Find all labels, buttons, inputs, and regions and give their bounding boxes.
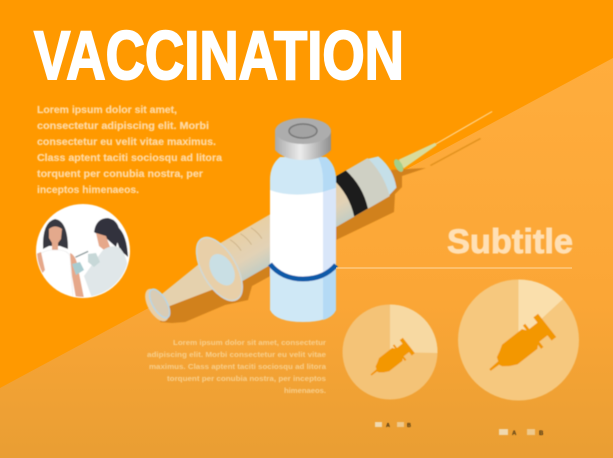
label xyxy=(270,188,336,279)
black plunger seal xyxy=(332,169,371,217)
intro text block: consectetur eu velit vitae maximus. xyxy=(37,136,216,148)
needle hub xyxy=(399,140,438,168)
barrel xyxy=(207,157,392,289)
pie chart: large xyxy=(458,280,579,400)
body text lower: himenaeos. xyxy=(284,386,326,395)
intro text block: inceptos himenaeos. xyxy=(37,184,139,196)
legend: small pie: B xyxy=(407,423,411,429)
intro text block: Class aptent taciti sociosqu ad litora xyxy=(37,152,222,164)
illustration: syringe and vial xyxy=(132,81,510,340)
vial xyxy=(270,118,336,322)
intro text block xyxy=(37,104,222,196)
syringe xyxy=(132,81,510,340)
cap xyxy=(275,130,331,160)
icon: vaccination scene in circle xyxy=(36,204,130,298)
subtitle: Subtitle xyxy=(447,223,573,261)
intro text block: Lorem ipsum dolor sit amet, xyxy=(37,104,177,116)
body text lower: adipiscing elit. Morbi consectetur eu velit vitae xyxy=(147,350,326,359)
nurse xyxy=(72,218,128,298)
needle xyxy=(434,111,492,145)
plunger rod xyxy=(152,258,222,317)
legend: small pie xyxy=(375,422,411,429)
finger flange xyxy=(187,230,252,308)
plunger end xyxy=(140,285,174,325)
legend: large pie: B xyxy=(539,431,544,437)
title: VACCINATION xyxy=(34,17,404,94)
legend: large pie: A xyxy=(512,431,517,437)
barrel tip xyxy=(365,151,401,198)
syringe shadow xyxy=(160,138,481,323)
icon: syringe xyxy=(481,314,556,382)
body text lower: Lorem ipsum dolor sit amet, consectetur xyxy=(173,338,326,347)
body text lower xyxy=(147,338,327,395)
blue band xyxy=(270,264,336,279)
subtitle rule xyxy=(336,268,572,269)
icon: syringe xyxy=(365,338,415,383)
body text lower: maximus. Class aptent taciti sociosqu ad litora xyxy=(149,362,327,371)
legend: large pie xyxy=(499,429,544,437)
graduations xyxy=(230,226,262,253)
pie chart: small xyxy=(342,304,438,400)
intro text block: consectetur adipiscing elit. Morbi xyxy=(37,120,209,132)
intro text block: torquent per conubia nostra, per xyxy=(37,168,203,180)
woman patient xyxy=(36,219,84,298)
legend: small pie: A xyxy=(386,423,390,429)
vial body xyxy=(270,157,336,322)
body text lower: torquent per conubia nostra, per inceptos xyxy=(167,374,326,383)
